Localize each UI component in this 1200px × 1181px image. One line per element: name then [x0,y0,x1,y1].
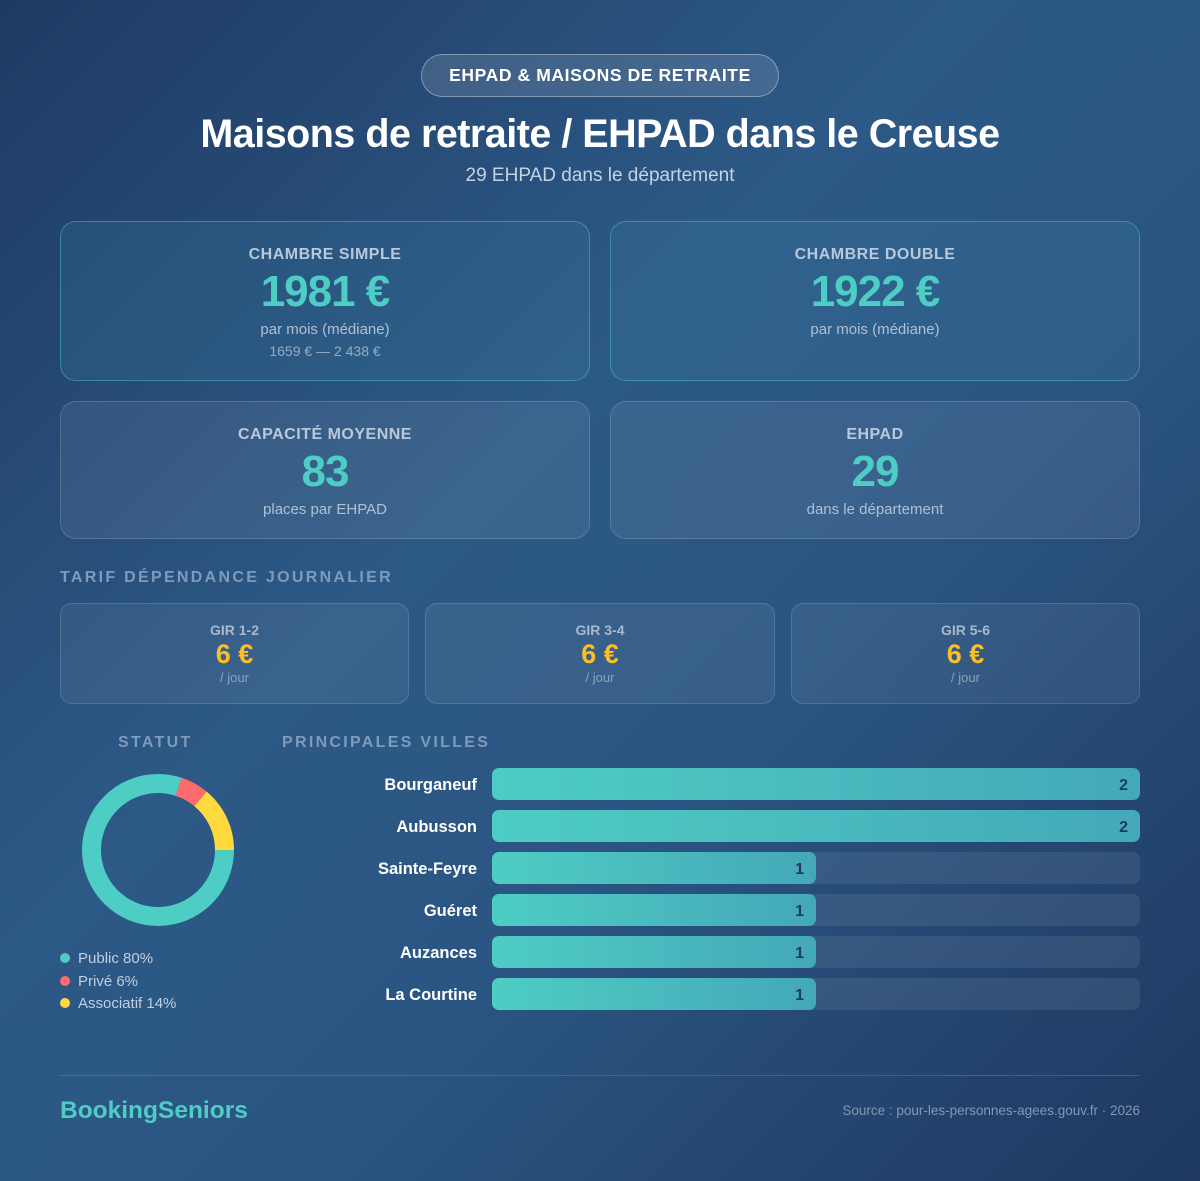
bar chart: villes: Sainte-Feyre [378,860,477,878]
gir 5-6: / jour [951,670,980,685]
subtitle: 29 EHPAD dans le département [466,165,734,186]
legend [60,950,176,1012]
card: ehpad: 29 [852,447,898,496]
card: chambre double: CHAMBRE DOUBLE [795,246,955,263]
legend: Public 80% [78,950,153,967]
bar chart: villes: Guéret [424,902,477,920]
bar chart: villes: Auzances [400,944,477,962]
card: capacité [60,401,590,539]
gir 1-2: 6 € [216,639,253,669]
legend: Privé 6% [78,972,138,990]
gir 5-6: GIR 5-6 [941,622,990,638]
gir 1-2: GIR 1-2 [210,622,259,638]
card: chambre double: 1922 € [811,267,939,316]
card: chambre double: par mois (médiane) [810,321,940,338]
gir 5-6: 6 € [947,639,984,669]
card: capacité: CAPACITÉ MOYENNE [238,426,412,443]
gir 3-4: / jour [586,670,614,685]
badge [421,54,779,97]
bar chart: villes: 2 [1119,819,1128,836]
card: ehpad [610,401,1140,539]
gir 3-4: GIR 3-4 [575,622,624,638]
donut chart [82,774,234,926]
bar chart: villes: 1 [795,903,804,920]
bar chart: villes: 1 [795,945,804,962]
section heading: tarif: TARIF DÉPENDANCE JOURNALIER [60,569,393,586]
card: chambre simple: 1981 € [261,267,389,316]
card: chambre simple: 1659 € — 2 438 € [269,343,381,359]
title: Maisons de retraite / EHPAD dans le Creuse [200,112,1000,156]
bar chart: villes: 1 [795,987,804,1004]
bar chart: villes: La Courtine [385,986,477,1004]
gir 3-4: 6 € [581,639,619,669]
gir 1-2 [60,603,409,704]
gir 3-4 [425,603,775,704]
gir 1-2: / jour [220,670,249,685]
card: chambre simple [60,221,590,381]
badge: EHPAD & MAISONS DE RETRAITE [449,65,751,85]
card: capacité: 83 [302,447,348,496]
card: chambre simple: par mois (médiane) [260,321,390,338]
card: ehpad: dans le département [807,501,943,518]
source: Source : pour-les-personnes-agees.gouv.fr · 2026 [842,1103,1140,1118]
section heading: statut: STATUT [118,734,193,751]
card: capacité: places par EHPAD [263,501,387,518]
bar chart: villes: Aubusson [396,818,477,836]
bar chart: villes [378,768,1140,1010]
gir 5-6 [791,603,1140,704]
bar chart: villes: 1 [795,861,804,878]
logo: BookingSeniors [60,1097,248,1124]
section heading: villes: PRINCIPALES VILLES [282,734,490,751]
card: ehpad: EHPAD [846,426,904,443]
bar chart: villes: Bourganeuf [384,776,477,794]
card: chambre simple: CHAMBRE SIMPLE [249,246,401,263]
legend: Associatif 14% [78,995,176,1012]
bar chart: villes: 2 [1119,777,1128,794]
card: chambre double [610,221,1140,381]
